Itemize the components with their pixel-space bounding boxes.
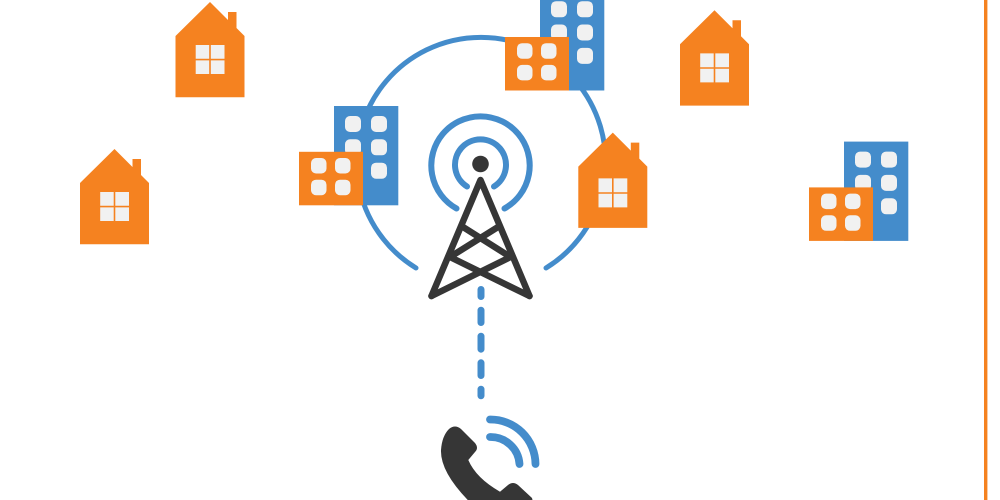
icon: radio tower with signal: [431, 116, 530, 296]
house: top right: [680, 10, 749, 106]
tower frame: [432, 180, 530, 296]
building: inside ring top: [505, 0, 604, 91]
handset: [441, 426, 535, 500]
house: inside ring: [578, 133, 647, 228]
house: left: [80, 149, 149, 244]
dashed link between tower and phone: [478, 290, 484, 396]
right edge line: [984, 0, 987, 500]
call signal arcs: [490, 419, 536, 464]
building: inside ring left: [299, 106, 398, 205]
signal arcs: [431, 116, 530, 208]
house: top left: [176, 2, 244, 97]
tower dot: [472, 156, 489, 172]
building: right: [809, 142, 908, 241]
coverage ring: [356, 37, 606, 268]
icon: telephone handset with signal: [441, 419, 536, 500]
